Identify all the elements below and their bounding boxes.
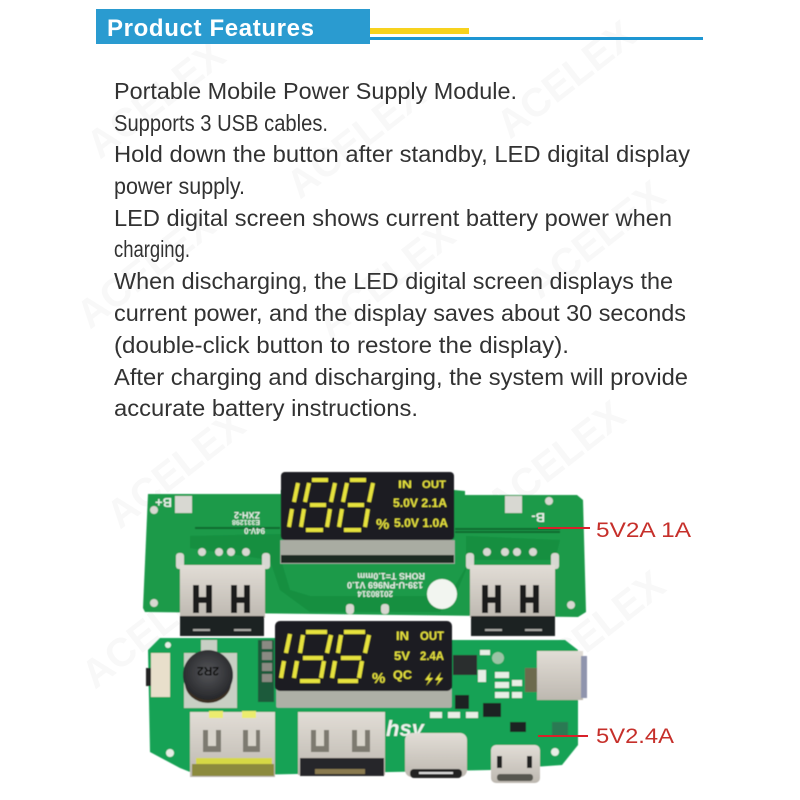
feature description text: After charging and discharging, the system will provide [114, 364, 688, 390]
photo: upper green PCB module [143, 490, 586, 636]
heading banner [96, 9, 370, 44]
text: ACELEX [78, 32, 234, 167]
display labels: 2.4A [420, 649, 444, 663]
display labels [376, 479, 448, 533]
photo: upper green PCB module: 94V-0 [244, 526, 265, 535]
text: ACELEX [68, 202, 224, 337]
USB-C port [405, 733, 467, 778]
board [148, 638, 578, 776]
logo [427, 579, 457, 609]
display labels: QC [393, 668, 412, 682]
board [143, 490, 586, 617]
photo: upper green PCB module: B+ [155, 495, 172, 510]
feature description text: current power, and the display saves about 30 seconds [114, 300, 686, 326]
callout: upper module output: 5V2A 1A [596, 518, 692, 542]
feature description text: Supports 3 USB cables. [114, 110, 328, 136]
display labels: OUT [422, 479, 446, 491]
feature description text: power supply. [114, 173, 245, 199]
photo: upper green PCB module: 139-U-PN969 V1.0 [347, 580, 423, 590]
feature description text: (double-click button to restore the display). [114, 332, 569, 358]
blue rule [316, 37, 703, 40]
display labels: 5.0V 2.1A [393, 498, 447, 510]
photo: upper green PCB module: ZXH-2 [234, 510, 260, 520]
callout: lower module output [538, 724, 675, 748]
feature description text: When discharging, the LED digital screen displays the [114, 268, 673, 294]
display labels: IN [398, 479, 412, 491]
callout: lower module output: 5V2.4A [596, 724, 675, 748]
inductor [183, 640, 237, 708]
display labels: % [376, 516, 389, 533]
feature description text: accurate battery instructions. [114, 395, 418, 421]
display labels: 5.0V 1.0A [394, 518, 448, 530]
photo: upper green PCB module: 20180314 [357, 589, 393, 598]
header: Product Features banner [96, 9, 703, 44]
text: ACELEX [518, 172, 674, 307]
display labels: 5V [394, 649, 410, 663]
inductor: 2R2 [197, 664, 219, 678]
components [165, 640, 568, 757]
yellow accent bar [316, 28, 469, 34]
photo: upper green PCB module: E331298 [232, 518, 260, 525]
yellow USB port [190, 711, 275, 777]
heading: Product Features [107, 15, 314, 42]
solder pads and silkscreen [150, 496, 575, 614]
LED display: upper module [280, 472, 455, 564]
display labels [372, 631, 444, 687]
side switch [146, 653, 170, 697]
text: ACELEX [518, 562, 674, 697]
black USB port [298, 712, 385, 776]
LED display: lower module [275, 621, 452, 708]
text: ACELEX [98, 402, 254, 537]
seven-segment digits [281, 632, 369, 681]
photo: lower green PCB module [146, 638, 587, 783]
feature description text: Portable Mobile Power Supply Module. [114, 78, 517, 104]
icon: fast charge bolts [425, 672, 443, 686]
side connector [525, 651, 587, 700]
display labels: IN [396, 631, 409, 643]
text: ACELEX [308, 212, 464, 347]
text: ACELEX [73, 562, 229, 697]
silkscreen logo: hsy [386, 716, 426, 741]
seven-segment digits [289, 480, 373, 530]
micro USB port [491, 745, 540, 783]
display labels: % [372, 670, 385, 687]
photo: upper green PCB module: B- [531, 510, 545, 525]
feature description text: charging. [114, 236, 190, 262]
text: ACELEX [278, 72, 434, 207]
feature description text: LED digital screen shows current battery power when [114, 205, 672, 231]
text: ACELEX [478, 392, 634, 527]
right USB port [470, 565, 555, 636]
left USB port [180, 565, 265, 636]
feature description text [114, 78, 690, 421]
feature description text: Hold down the button after standby, LED digital display [114, 141, 690, 167]
text: ACELEX [488, 12, 644, 147]
display labels: OUT [420, 631, 444, 643]
photo: upper green PCB module: ROHS T=1.0mm [357, 571, 425, 581]
